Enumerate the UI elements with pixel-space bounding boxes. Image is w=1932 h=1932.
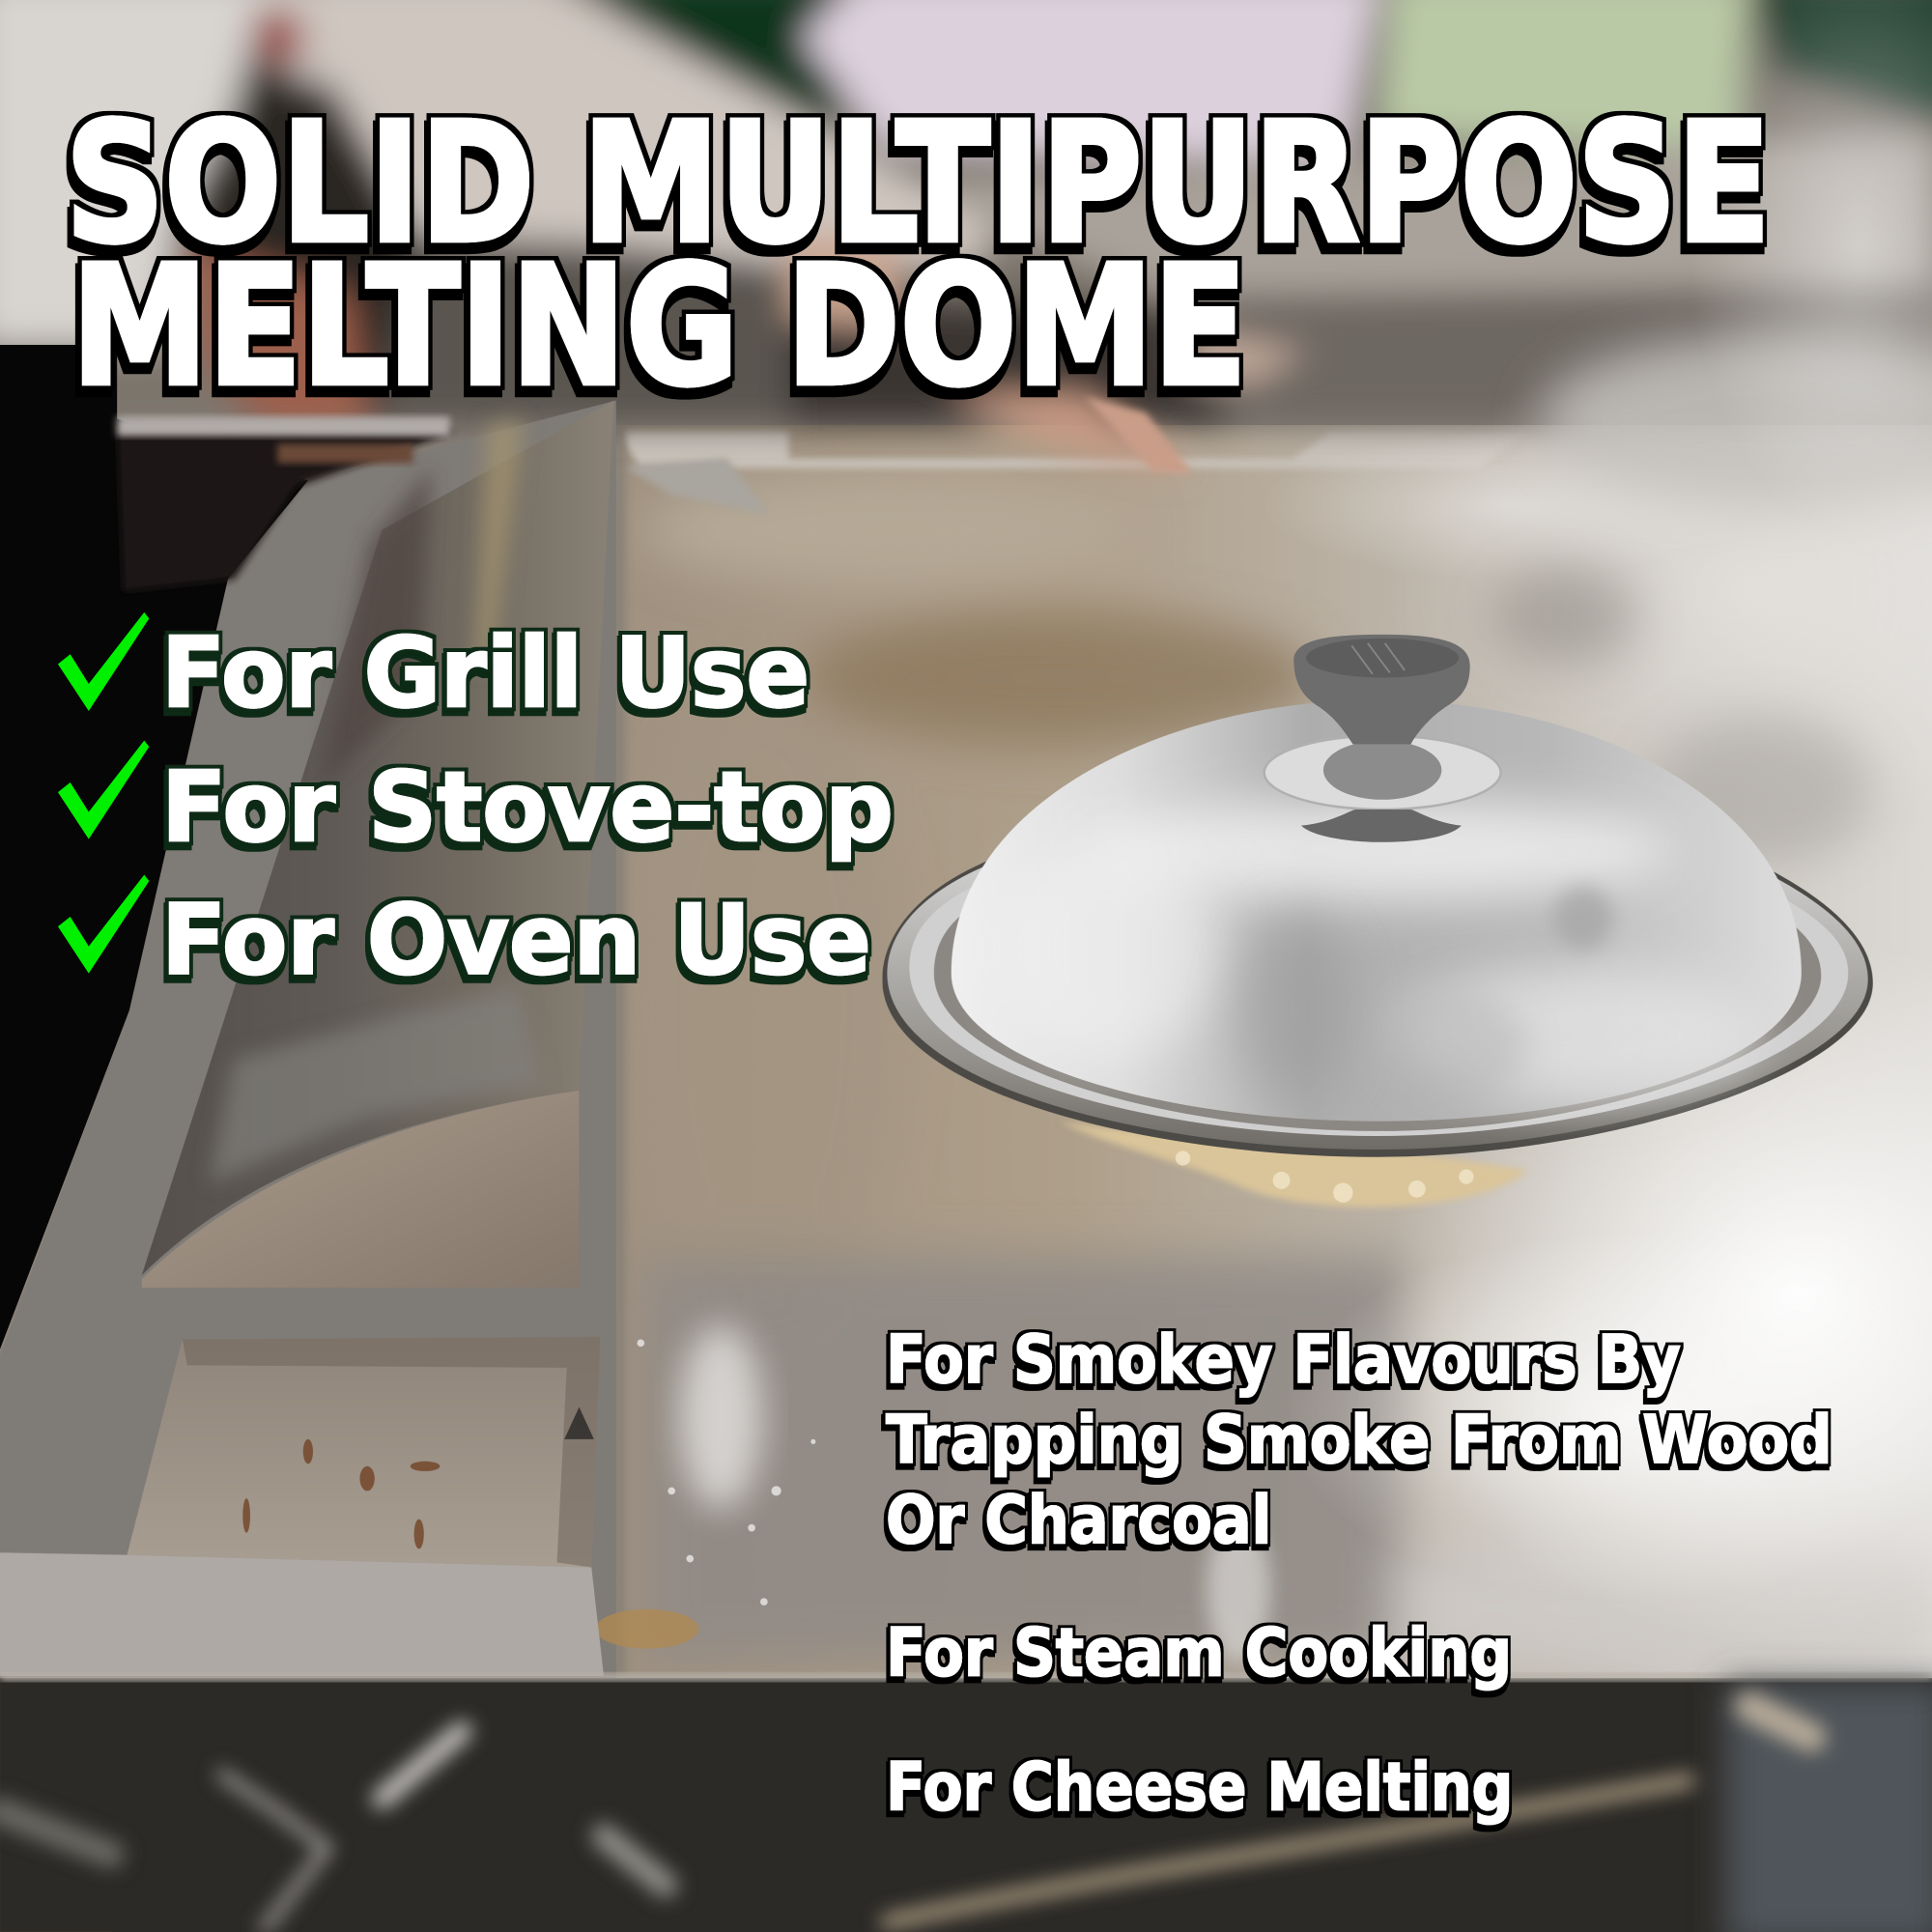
blurred counter end: [117, 425, 456, 591]
check item: oven: For Oven Use: [161, 886, 871, 997]
title: [66, 88, 1771, 423]
check item: stove-top: For Stove-top: [161, 753, 894, 864]
product: melting dome lid: [882, 635, 1873, 1208]
blurred background top: [0, 0, 1932, 474]
uses text block: For Steam Cooking: [886, 1615, 1512, 1692]
dome rim: [882, 838, 1873, 1157]
square drain hole: [127, 1337, 600, 1567]
raised trough: [142, 401, 613, 1275]
title: MELTING DOME: [71, 231, 1247, 423]
steam clouds: [1257, 0, 1932, 1651]
knob handle: [1293, 635, 1470, 744]
griddle reflection: [679, 1324, 763, 1509]
black apron left: [0, 345, 308, 1350]
griddle top edge: [616, 431, 1528, 469]
griddle left gutter: [579, 425, 626, 1676]
griddle stains: [629, 474, 1932, 1663]
griddle splatter specks: [637, 1339, 815, 1605]
lower counter lip: [0, 1552, 604, 1676]
griddle-side hand tip: [1084, 397, 1193, 474]
uses text block: For Cheese Melting: [886, 1749, 1513, 1827]
trough end face: [142, 1091, 579, 1288]
griddle corner paper: [622, 458, 770, 515]
checklist: [58, 612, 894, 997]
dome highlights and smoke: [998, 799, 1762, 1103]
marble veins: [0, 1707, 1811, 1928]
check item: grill: For Grill Use: [161, 618, 810, 729]
uses text block: Trapping Smoke From Wood: [886, 1402, 1833, 1479]
grease spots: [242, 1407, 698, 1649]
dome body: [952, 699, 1802, 1122]
uses text block: [886, 1321, 1833, 1827]
uses text block: Or Charcoal: [886, 1482, 1271, 1559]
uses text block: For Smokey Flavours By: [886, 1321, 1681, 1399]
griddle surface: [604, 425, 1932, 1682]
knob collar: [1264, 735, 1501, 810]
marble base: [0, 1678, 1932, 1932]
food under dome: [1060, 1122, 1528, 1208]
steel counter: [0, 401, 616, 1682]
trough reflections: [210, 419, 542, 1182]
